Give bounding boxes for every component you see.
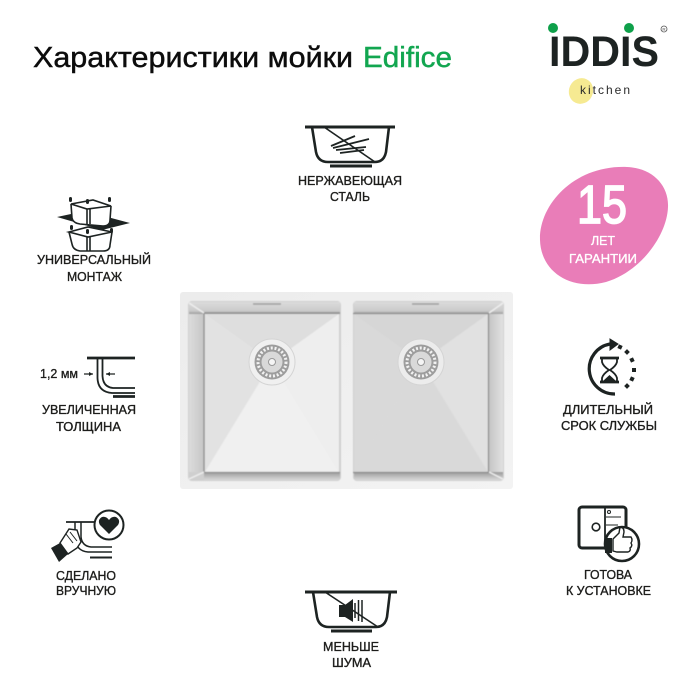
icon: long service life	[589, 339, 636, 394]
title: Характеристики мойки	[33, 42, 353, 74]
right basin	[353, 301, 504, 481]
label: ready to install: К УСТАНОВКЕ	[566, 583, 651, 598]
logo: IDDIS kitchen: R	[662, 27, 666, 32]
label: increased thickness: ТОЛЩИНА	[56, 419, 121, 434]
label: ready to install	[566, 567, 651, 598]
label: universal mounting: УНИВЕРСАЛЬНЫЙ	[37, 252, 151, 267]
label: handmade: СДЕЛАНО	[56, 568, 116, 583]
warranty badge: ГАРАНТИИ	[569, 251, 637, 266]
label: long service life	[561, 402, 657, 433]
right drain	[398, 339, 444, 385]
logo: IDDIS kitchen	[548, 23, 667, 108]
icon: ready to install	[579, 507, 639, 561]
icon: handmade	[51, 510, 124, 562]
label: universal mounting	[37, 252, 151, 284]
label: less noise: МЕНЬШЕ	[323, 639, 379, 654]
label: less noise	[323, 639, 379, 670]
label: less noise: ШУМА	[332, 655, 371, 670]
label: universal mounting: МОНТАЖ	[67, 269, 122, 284]
label: stainless steel: СТАЛЬ	[330, 189, 370, 204]
label: ready to install: ГОТОВА	[584, 567, 632, 582]
icon: increased thickness	[84, 358, 135, 396]
icon: universal mounting	[57, 197, 130, 251]
label: handmade: ВРУЧНУЮ	[56, 583, 116, 598]
label: increased thickness: УВЕЛИЧЕННАЯ	[42, 402, 136, 417]
label: stainless steel	[298, 173, 402, 204]
label: handmade	[56, 568, 116, 598]
warranty badge: 15	[577, 175, 627, 235]
label: long service life: ДЛИТЕЛЬНЫЙ	[563, 402, 653, 417]
label: increased thickness	[42, 402, 136, 434]
label: long service life: СРОК СЛУЖБЫ	[561, 418, 657, 433]
icon: less noise	[305, 592, 397, 631]
logo: IDDIS kitchen: IDDIS	[549, 28, 659, 76]
left drain	[249, 339, 295, 385]
icon: stainless steel sink	[305, 127, 395, 166]
panel: sink photo	[180, 292, 513, 489]
left basin	[188, 301, 341, 481]
label: stainless steel: НЕРЖАВЕЮЩАЯ	[298, 173, 402, 188]
label: 1.2 mm: 1,2 мм	[40, 366, 78, 381]
warranty badge: ЛЕТ	[591, 233, 615, 248]
warranty badge	[540, 167, 668, 284]
logo: IDDIS kitchen: kitchen	[580, 83, 630, 97]
title: Edifice	[363, 42, 452, 74]
